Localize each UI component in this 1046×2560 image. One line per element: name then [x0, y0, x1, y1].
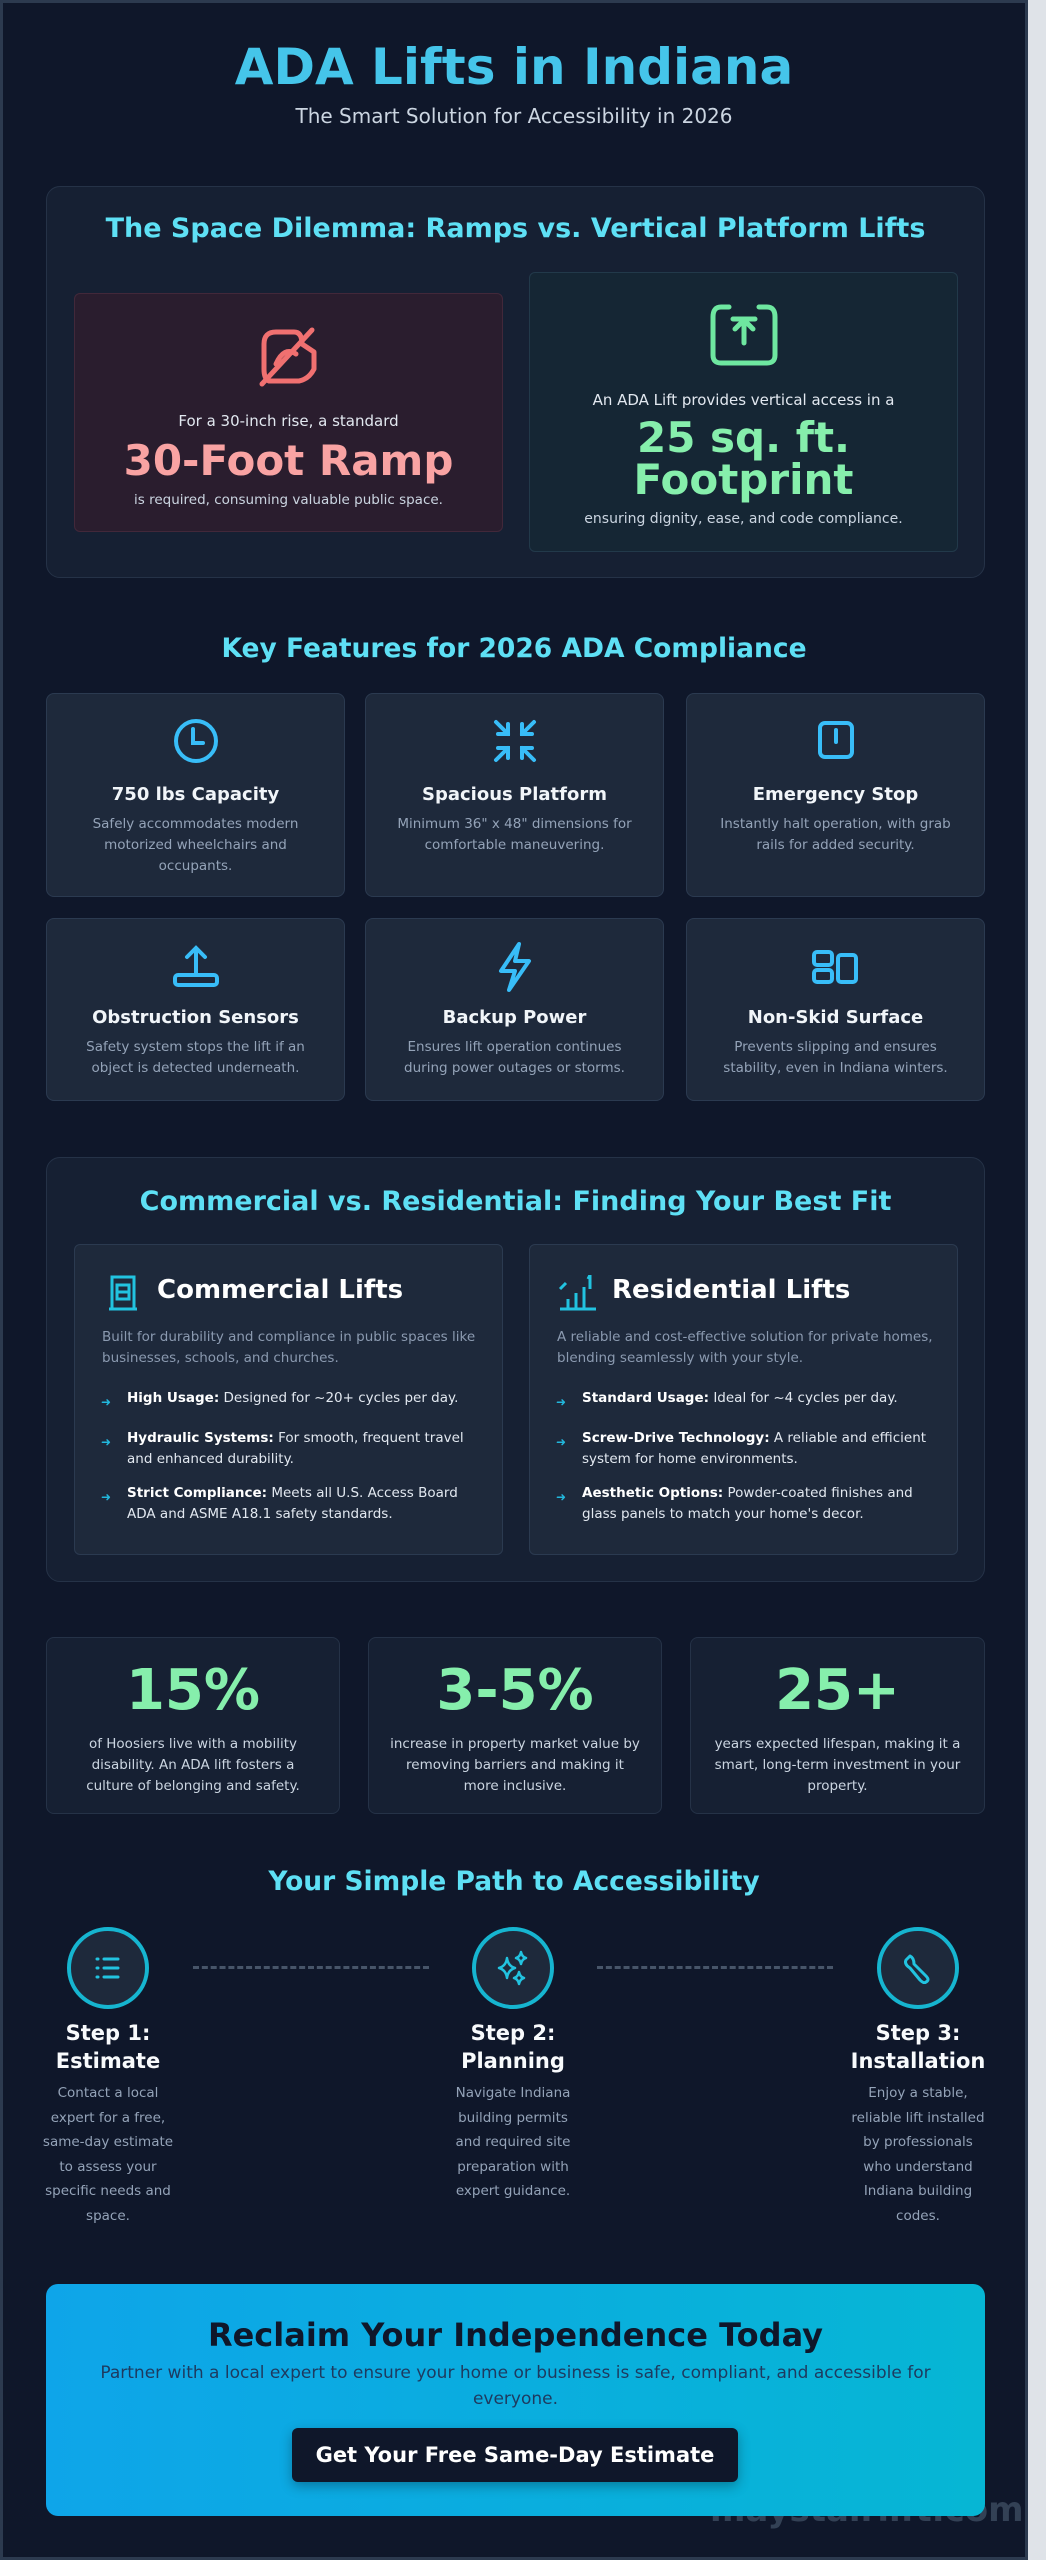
- panel: space dilemma: [46, 186, 985, 578]
- CTA button: Get Your Free Same-Day Estimate: [316, 2443, 714, 2467]
- step 3: [851, 1927, 985, 2224]
- feature: sensors: [46, 918, 345, 1101]
- icon: building: [109, 1276, 137, 1310]
- text: Contact a local expert for a free, same-day estimate to assess your specific needs and space.: [43, 2085, 173, 2224]
- watermark: maystairlift.com: [710, 2490, 1024, 2530]
- card: residential: [529, 1244, 958, 1555]
- card: lift: 25 sq. ft.: [637, 413, 850, 462]
- stat: 3-5%: 3-5%: [436, 1658, 594, 1723]
- card: residential: A reliable and cost-effective solution for private homes, blending seamlessly with your style.: [557, 1329, 933, 1366]
- card: ramp: [74, 293, 503, 532]
- card: commercial: [74, 1244, 503, 1555]
- text: Installation: [851, 2049, 985, 2073]
- feature: backup power: Ensures lift operation continues during power outages or storms.: [404, 1039, 625, 1076]
- icon: upload: [173, 945, 219, 987]
- icon: no ramp: [260, 328, 316, 386]
- panel: commercial vs residential: [46, 1157, 985, 1582]
- connector lines: [193, 1966, 429, 1969]
- stat: 3-5%: [368, 1637, 662, 1814]
- heading: commercial vs residential: Commercial vs. Residential: Finding Your Best Fit: [140, 1186, 891, 1217]
- icon: clock: [174, 719, 218, 763]
- step 1: [43, 1927, 173, 2224]
- card: ramp: 30-Foot Ramp: [124, 436, 453, 485]
- feature: backup power: Backup Power: [443, 1007, 586, 1028]
- text: Step 1:: [66, 2021, 150, 2045]
- text: Estimate: [56, 2049, 160, 2073]
- feature: sensors: Safety system stops the lift if an object is detected underneath.: [86, 1039, 305, 1076]
- card: commercial: High Usage: Designed for ~20+ cycles per day.: [127, 1390, 458, 1406]
- feature: platform: [365, 693, 664, 897]
- stat: 15%: [46, 1637, 340, 1814]
- text: Step 2:: [471, 2021, 555, 2045]
- CTA heading: Reclaim Your Independence Today: [208, 2316, 823, 2354]
- card: commercial: Strict Compliance: Meets all U.S. Access Board ADA and ASME A18.1 safety standards.: [127, 1485, 458, 1522]
- card: residential: Aesthetic Options: Powder-coated finishes and glass panels to match your home's decor.: [582, 1485, 913, 1522]
- text: Enjoy a stable, reliable lift installed by professionals who understand Indiana building codes.: [851, 2085, 985, 2224]
- icon: layout: [812, 950, 858, 984]
- CTA panel: [46, 2284, 985, 2516]
- card: commercial: Hydraulic Systems: For smooth, frequent travel and enhanced durability.: [127, 1430, 464, 1467]
- feature: capacity: 750 lbs Capacity: [112, 784, 279, 805]
- subtitle: The Smart Solution for Accessibility in 2026: [295, 104, 732, 128]
- step 2: [456, 1927, 570, 2199]
- feature: emergency stop: Instantly halt operation, with grab rails for added security.: [720, 816, 951, 853]
- stat: 3-5%: increase in property market value by removing barriers and making it more inclusive.: [390, 1736, 640, 1794]
- stat: 15%: 15%: [126, 1658, 260, 1723]
- heading: key features: Key Features for 2026 ADA Compliance: [221, 633, 807, 664]
- feature: emergency stop: [686, 693, 985, 897]
- feature: sensors: Obstruction Sensors: [92, 1007, 299, 1028]
- card: residential: Screw-Drive Technology: A reliable and efficient system for home environments.: [582, 1430, 926, 1467]
- icon: stop: [818, 721, 854, 759]
- icon: home chart: [559, 1275, 596, 1310]
- icon: sparkles: [472, 1927, 554, 2009]
- CTA button: [292, 2428, 738, 2482]
- heading: space dilemma: The Space Dilemma: Ramps vs. Vertical Platform Lifts: [106, 213, 925, 244]
- feature: platform: Minimum 36" x 48" dimensions for comfortable maneuvering.: [397, 816, 632, 853]
- CTA text: Partner with a local expert to ensure your home or business is safe, compliant, and accessible for everyone.: [100, 2363, 931, 2409]
- heading: path: Your Simple Path to Accessibility: [268, 1866, 760, 1897]
- icon: lift: [710, 304, 778, 366]
- feature: capacity: [46, 693, 345, 897]
- text: ramp: For a 30-inch rise, a standard: [178, 412, 399, 430]
- icon: wrench: [877, 1927, 959, 2009]
- card: lift: [529, 272, 958, 552]
- text: Planning: [461, 2049, 565, 2073]
- stat: 25+: years expected lifespan, making it a smart, long-term investment in your property.: [715, 1736, 960, 1794]
- icon: list: [67, 1927, 149, 2009]
- text: Navigate Indiana building permits and required site preparation with expert guidance.: [456, 2085, 570, 2199]
- feature: capacity: Safely accommodates modern motorized wheelchairs and occupants.: [93, 816, 298, 874]
- icon: compress: [494, 720, 536, 762]
- title: ADA Lifts in Indiana: [235, 38, 793, 96]
- card: lift: Footprint: [634, 455, 853, 504]
- icon: bolt: [498, 942, 532, 992]
- feature: non-skid: Non-Skid Surface: [748, 1007, 923, 1028]
- card: lift: ensuring dignity, ease, and code compliance.: [584, 511, 903, 527]
- feature: non-skid: [686, 918, 985, 1101]
- feature: backup power: [365, 918, 664, 1101]
- card: residential: Standard Usage: Ideal for ~4 cycles per day.: [582, 1390, 898, 1406]
- feature: non-skid: Prevents slipping and ensures stability, even in Indiana winters.: [723, 1039, 948, 1076]
- text: Step 3:: [876, 2021, 960, 2045]
- stat: 15%: of Hoosiers live with a mobility disability. An ADA lift fosters a culture of belonging and safety.: [86, 1736, 300, 1794]
- card: commercial: Commercial Lifts: [157, 1275, 403, 1305]
- stat: 25+: 25+: [775, 1658, 900, 1723]
- feature: platform: Spacious Platform: [422, 784, 607, 805]
- text: lift: An ADA Lift provides vertical access in a: [593, 391, 894, 409]
- card: residential: Residential Lifts: [612, 1275, 850, 1305]
- card: commercial: Built for durability and compliance in public spaces like businesses, schools, and churches.: [102, 1329, 475, 1366]
- feature: emergency stop: Emergency Stop: [753, 784, 918, 805]
- stat: 25+: [690, 1637, 985, 1814]
- card: ramp: is required, consuming valuable public space.: [134, 492, 443, 508]
